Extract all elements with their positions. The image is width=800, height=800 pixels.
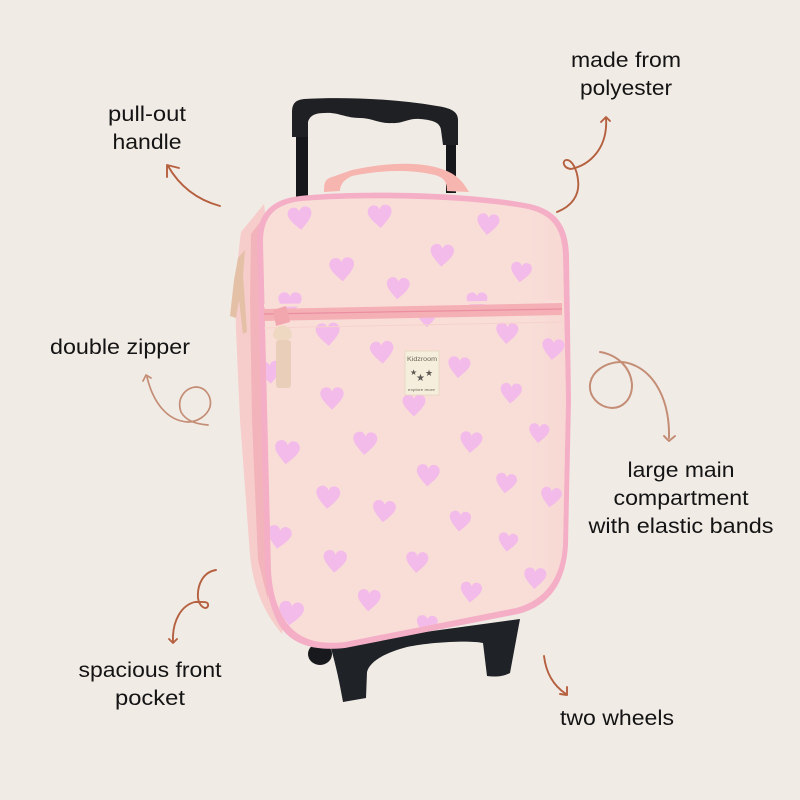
brand label: ★ <box>425 368 433 378</box>
callout: two wheels: two wheels <box>560 707 674 730</box>
callout: double zipper: double zipper <box>50 336 190 359</box>
callout: spacious front pocket: spacious front <box>78 659 222 682</box>
callout: made from polyester: made from <box>571 49 681 72</box>
zipper pull tab <box>273 306 292 388</box>
callout: large main compartment: large main <box>628 459 734 482</box>
wheel <box>308 643 332 665</box>
telescopic poles <box>296 135 456 198</box>
front pocket zipper <box>264 300 562 328</box>
panel shading <box>263 198 566 643</box>
arrow: large main compartment <box>590 352 675 441</box>
brand label: ★ <box>416 373 425 384</box>
side zipper pull <box>230 250 247 334</box>
callout: made from polyester: polyester <box>580 77 672 100</box>
callout: made from polyester <box>571 49 681 100</box>
callout: pull-out handle: pull-out <box>108 103 186 126</box>
brand label <box>405 351 439 395</box>
arrow: double zipper <box>143 375 210 425</box>
brand label: ★ <box>410 368 417 377</box>
arrow: pull-out handle <box>167 165 220 206</box>
arrow: two wheels <box>544 656 567 695</box>
brand label: Kidzroom <box>407 357 437 363</box>
callout: large main compartment: with elastic bands <box>587 515 774 538</box>
side zipper strip <box>250 222 268 600</box>
front panel <box>263 198 566 643</box>
arrow: spacious front pocket <box>169 570 216 643</box>
suitcase <box>230 98 571 702</box>
brand label: explore more <box>408 388 435 392</box>
arrow: made from polyester <box>557 117 610 212</box>
carry handle <box>324 164 469 192</box>
callout: large main compartment: compartment <box>614 487 749 510</box>
callout: large main compartment <box>587 459 774 538</box>
heart pattern <box>258 204 565 636</box>
pull-out handle grip <box>292 98 458 145</box>
side panel <box>236 204 300 634</box>
callout: pull-out handle: handle <box>112 131 182 154</box>
callout: spacious front pocket: pocket <box>115 687 185 710</box>
callout: spacious front pocket <box>78 659 222 710</box>
callout: pull-out handle <box>108 103 186 154</box>
wheel housing legs <box>330 619 520 702</box>
front binding <box>257 193 571 649</box>
